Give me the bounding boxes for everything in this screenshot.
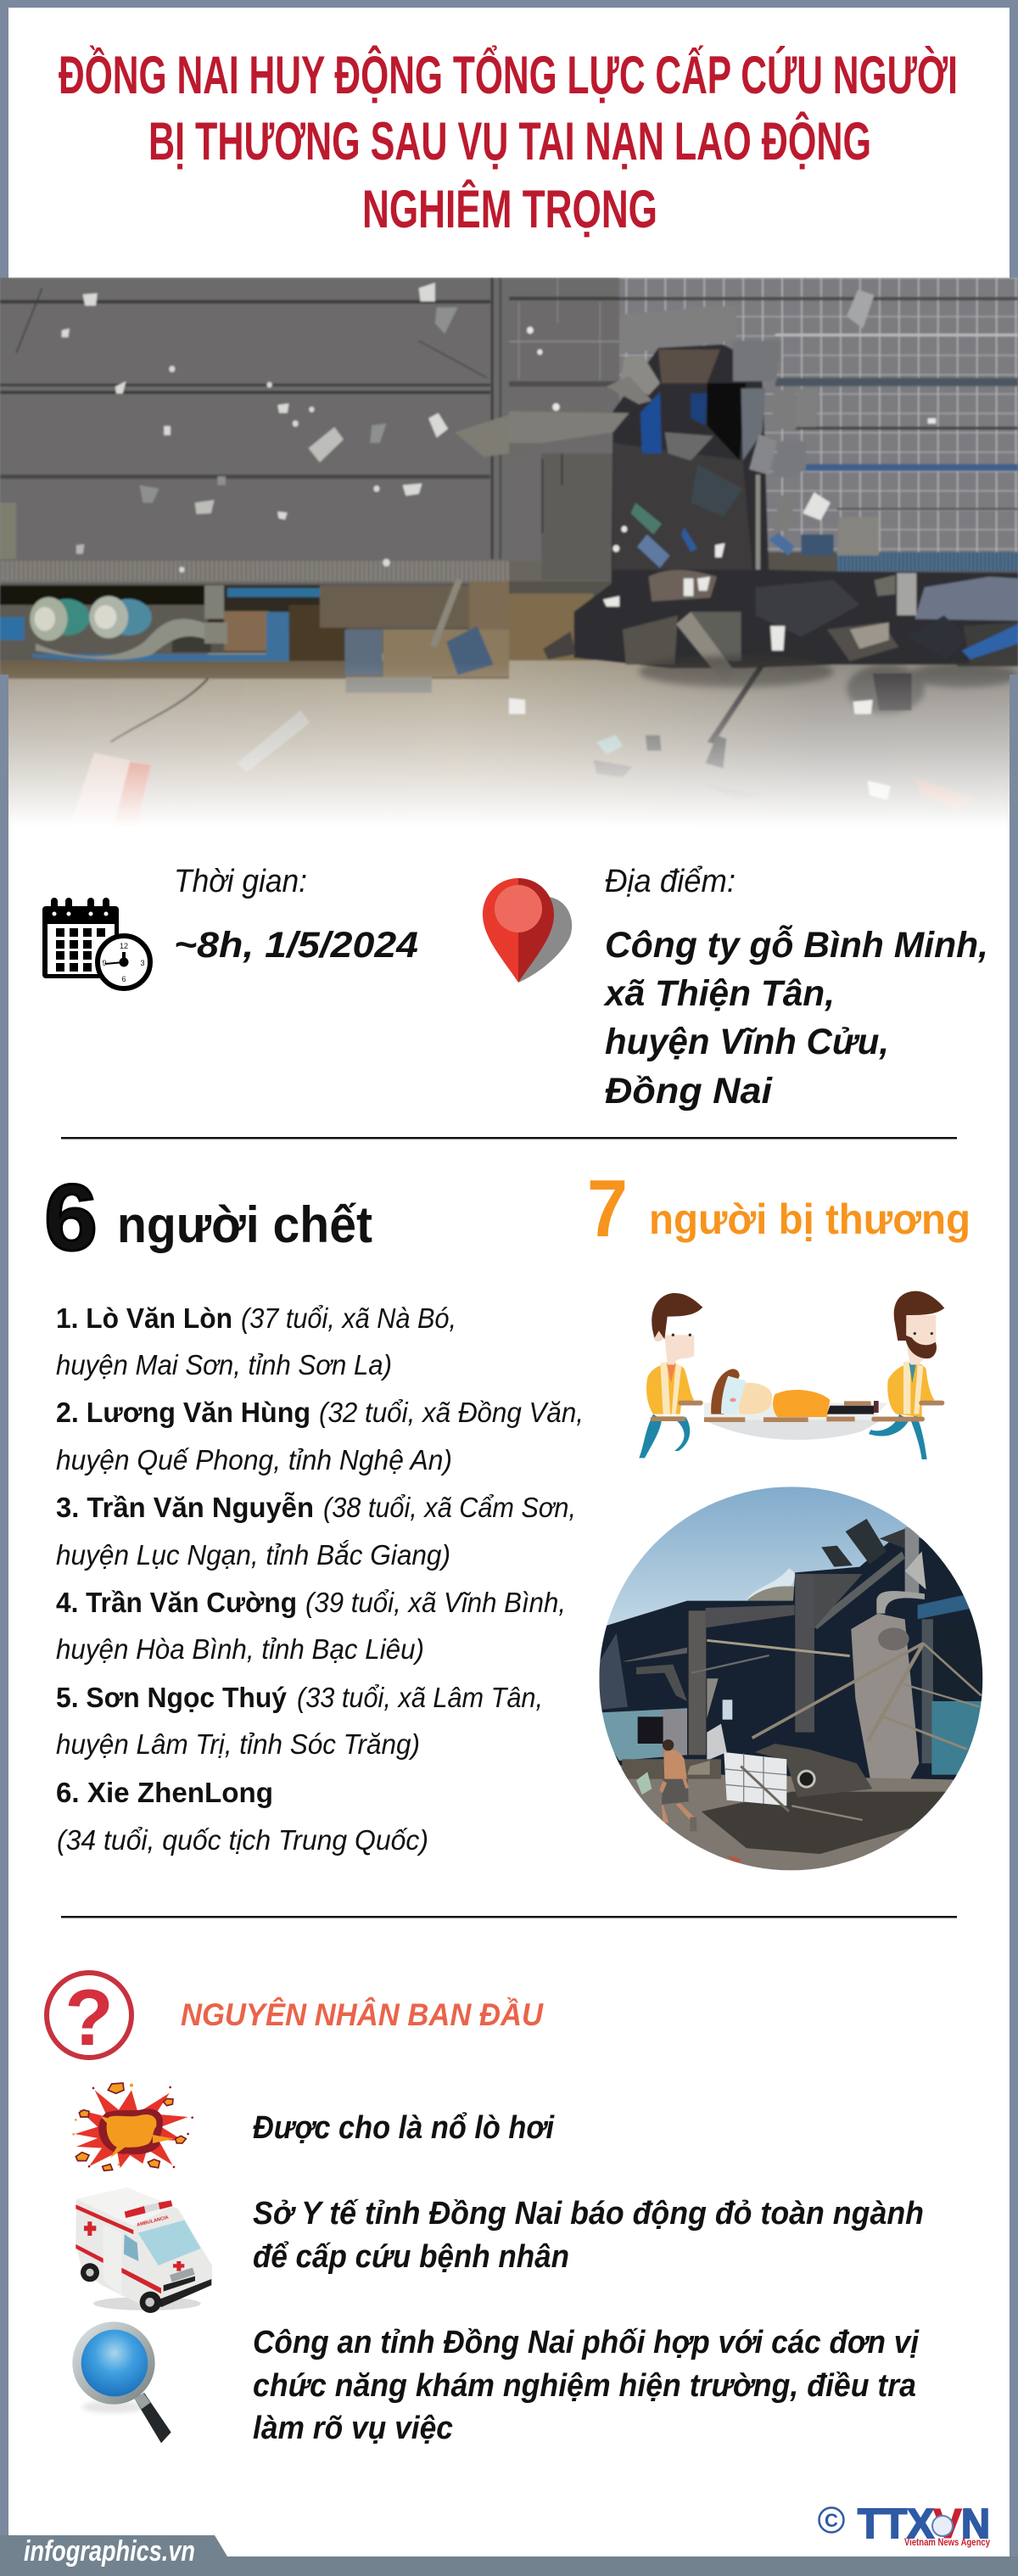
victim 3: huyện Lục Ngạn, tỉnh Bắc Giang): [56, 1539, 450, 1571]
icon: ambulance: [76, 2187, 212, 2313]
icon: calendar with clock: 9: [102, 959, 107, 967]
victim 3: (38 tuổi, xã Cẩm Sơn,: [323, 1492, 576, 1523]
logo: TTXVN: V: [933, 2501, 962, 2547]
victim 6: [56, 1777, 428, 1856]
stat: 7 injured: người bị thương: [649, 1196, 970, 1243]
icon: magnifier: [72, 2321, 171, 2443]
location label: Địa điểm:: [605, 864, 736, 899]
victim 5: huyện Lâm Trị, tỉnh Sóc Trăng): [56, 1728, 420, 1760]
cause 3 text: Công an tỉnh Đồng Nai phối hợp với các đơn vị: [253, 2325, 920, 2360]
victim 2: [56, 1397, 584, 1476]
icon: explosion: [72, 2083, 193, 2170]
list of victims: [56, 1302, 584, 1856]
icon: calendar with clock: 6: [121, 975, 126, 983]
victim 1: [56, 1302, 456, 1380]
footer tab: infographics.vn: [24, 2535, 195, 2568]
stat: 7 injured: [587, 1163, 970, 1254]
hero photo: damaged factory roof from above: [0, 277, 1018, 832]
icon: calendar with clock: [42, 901, 150, 988]
location value: xã Thiện Tân,: [603, 973, 835, 1014]
cause 3 text: làm rõ vụ việc: [253, 2411, 453, 2446]
location value: Công ty gỗ Bình Minh,: [605, 924, 988, 966]
location value: huyện Vĩnh Cửu,: [605, 1022, 889, 1062]
time label: Thời gian:: [174, 864, 307, 899]
victim 1: huyện Mai Sơn, tỉnh Sơn La): [56, 1349, 392, 1380]
icon: calendar with clock: 12: [120, 942, 128, 950]
logo: TTXVN: N: [961, 2501, 990, 2547]
victim 4: (39 tuổi, xã Vĩnh Bình,: [305, 1587, 566, 1618]
stretcher bars: [651, 1401, 944, 1422]
victim 1: (37 tuổi, xã Nà Bó,: [241, 1302, 456, 1334]
victim 2: huyện Quế Phong, tỉnh Nghệ An): [56, 1444, 452, 1476]
victim 6: 6. Xie ZhenLong: [56, 1777, 273, 1808]
right rescuer: [869, 1291, 944, 1459]
time value: ~8h, 1/5/2024: [174, 925, 418, 966]
victim 5: 5. Sơn Ngọc Thuý: [56, 1682, 288, 1713]
section heading: NGUYÊN NHÂN BAN ĐẦU: [181, 1996, 544, 2032]
location value: Đồng Nai: [605, 1071, 773, 1112]
victim 3: 3. Trần Văn Nguyễn: [56, 1492, 314, 1523]
illustration: rescuers carrying stretcher: [639, 1291, 944, 1459]
worker: [659, 1739, 696, 1831]
dust collector tank: [851, 1591, 925, 1795]
victim 1: 1. Lò Văn Lòn: [56, 1302, 232, 1334]
victim 4: [56, 1587, 566, 1665]
stat: 6 deaths: người chết: [117, 1196, 372, 1253]
victim 3: [56, 1492, 576, 1571]
title: [59, 45, 958, 239]
stat: 7 injured: 7: [587, 1163, 628, 1254]
cause 2 text: Sở Y tế tỉnh Đồng Nai báo động đỏ toàn ngành: [253, 2196, 924, 2232]
footer tab: [0, 2535, 1018, 2576]
cause 1 text: Được cho là nổ lò hơi: [253, 2110, 555, 2146]
patient: [711, 1369, 879, 1417]
title: NGHIÊM TRỌNG: [362, 179, 657, 239]
victim 4: 4. Trần Văn Cường: [56, 1587, 297, 1618]
logo: TTXVN: C: [825, 2510, 838, 2531]
victim 2: (32 tuổi, xã Đồng Văn,: [319, 1397, 584, 1428]
cause 3 text: [253, 2325, 920, 2446]
victim 2: 2. Lương Văn Hùng: [56, 1397, 310, 1428]
cause 2 text: để cấp cứu bệnh nhân: [253, 2239, 569, 2275]
victim 5: (33 tuổi, xã Lâm Tân,: [297, 1682, 543, 1713]
logo: TTXVN: TTX: [858, 2501, 934, 2547]
left rescuer: [639, 1293, 702, 1458]
photo: collapsed factory in circle: [594, 1481, 993, 1879]
victim 4: huyện Hòa Bình, tỉnh Bạc Liêu): [56, 1633, 424, 1665]
stat: 6 deaths: 6: [44, 1166, 98, 1270]
cause 3 text: chức năng khám nghiệm hiện trường, điều tra: [253, 2368, 916, 2404]
ground and debris: [619, 1744, 954, 1870]
soft shadows blending debris into the ground: [639, 656, 1018, 714]
icon: map pin: [483, 878, 572, 983]
stat: 6 deaths: [44, 1166, 372, 1270]
logo: TTXVN: Vietnam News Agency: [904, 2538, 990, 2548]
location value: [603, 924, 988, 1112]
victim 6: (34 tuổi, quốc tịch Trung Quốc): [57, 1824, 428, 1856]
icon: question mark: [47, 1973, 131, 2062]
logo: TTXVN: [819, 2501, 990, 2548]
icon: calendar with clock: 3: [140, 959, 145, 967]
victim 5: [56, 1682, 543, 1760]
icon: ambulance: AMBULANCIA: [137, 2215, 169, 2228]
icon: question mark: ?: [64, 1973, 114, 2062]
cause 2 text: [253, 2196, 924, 2275]
